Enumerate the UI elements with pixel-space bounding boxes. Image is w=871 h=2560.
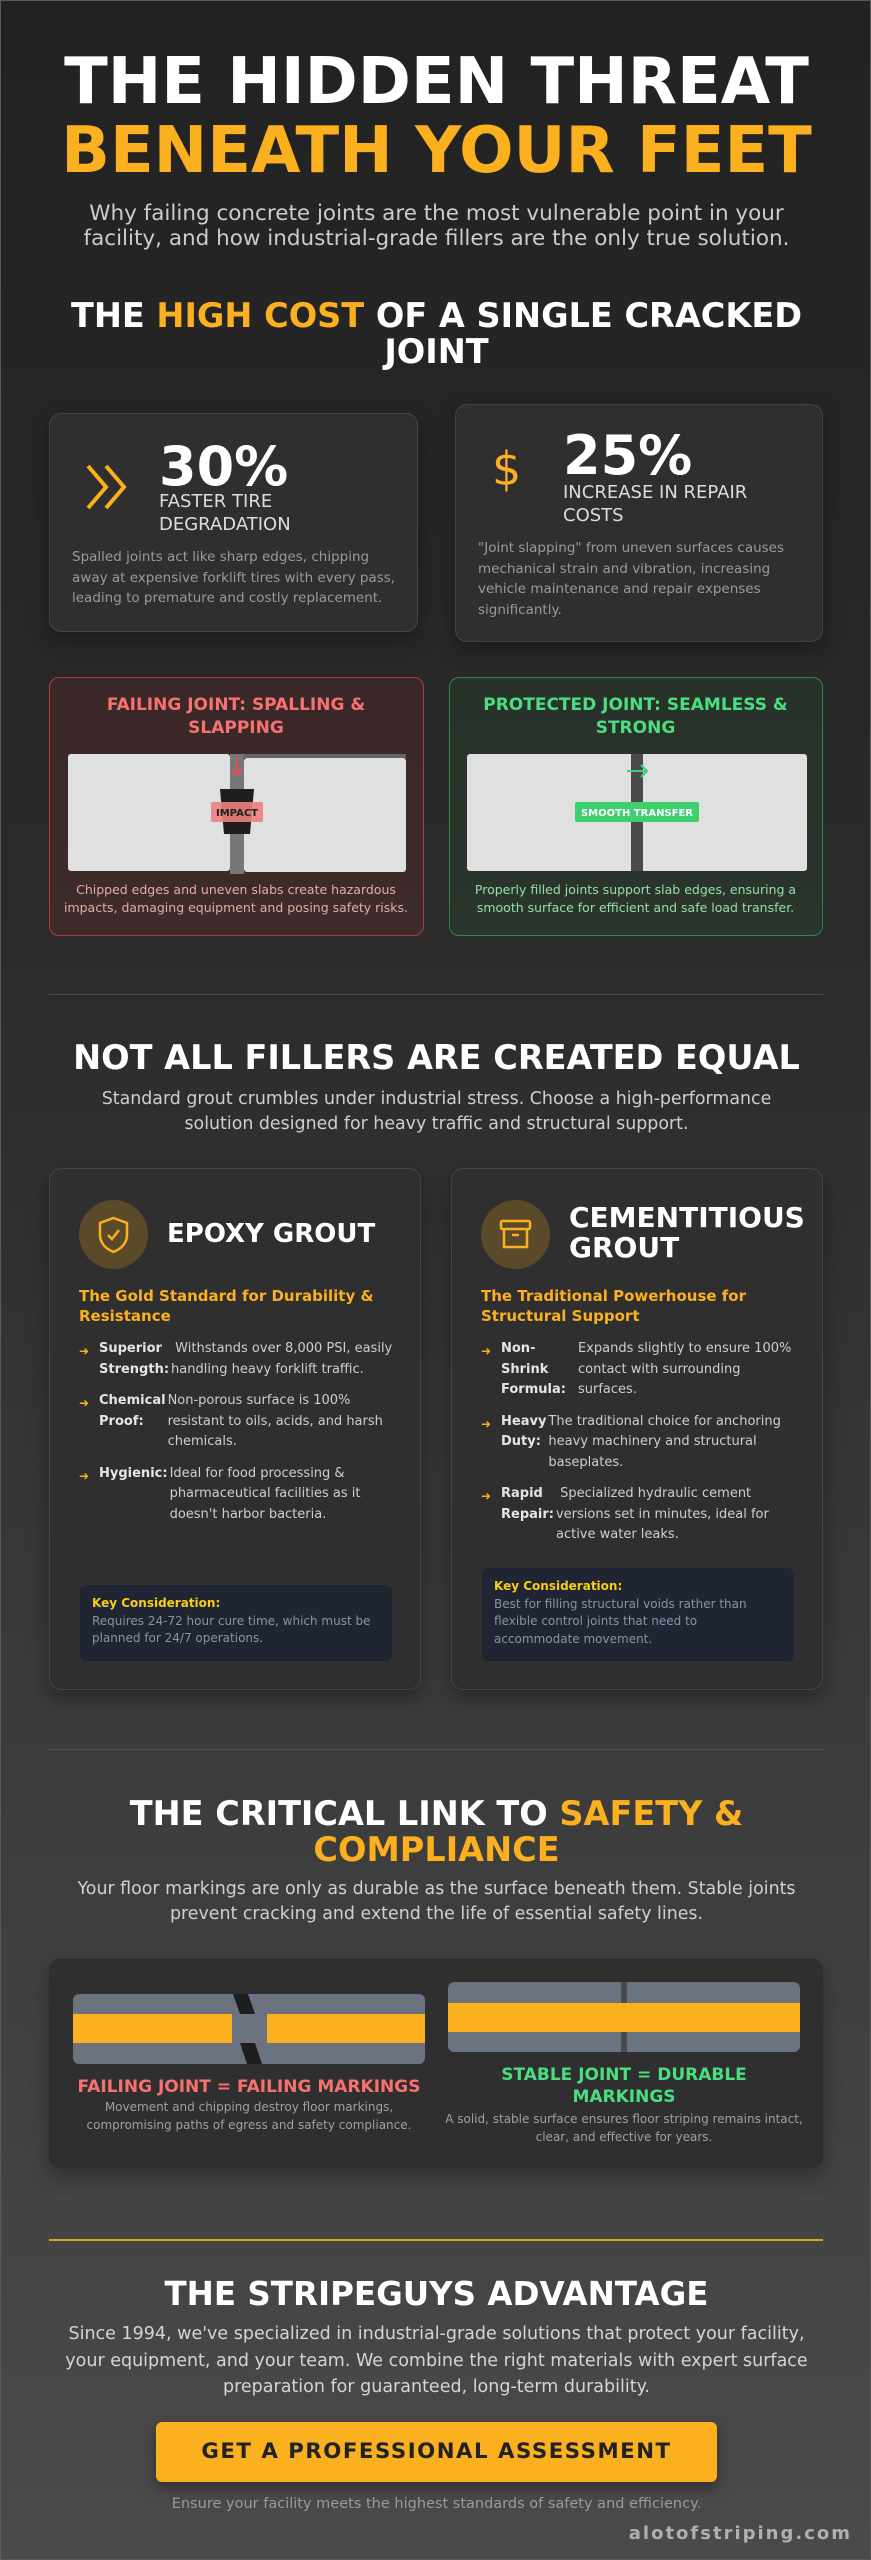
description: stable: clear, and effective for years. bbox=[536, 2130, 712, 2144]
illustration: stable markings bbox=[448, 1982, 800, 2052]
bullet list: Ideal for food processing & pharmaceutical facilities as it doesn't harbor bacteria. bbox=[170, 1466, 360, 1522]
label: stable bbox=[501, 2065, 747, 2107]
description: failing: Movement and chipping destroy floor markings, bbox=[105, 2100, 393, 2114]
heading bbox=[107, 695, 365, 738]
key consideration: Key Consideration: bbox=[494, 1579, 622, 1593]
icon: box bbox=[481, 1200, 550, 1269]
subtitle: critical link: prevent cracking and extend the life of essential safety lines. bbox=[170, 1904, 703, 1924]
bullet list: Strength: bbox=[99, 1362, 169, 1376]
bullet list: Proof: bbox=[99, 1414, 144, 1428]
description: failing: compromising paths of egress and safety compliance. bbox=[87, 2118, 411, 2132]
bullet list: ➜ bbox=[79, 1344, 89, 1358]
title: BENEATH YOUR FEET bbox=[61, 114, 812, 188]
heading: high cost: THE HIGH COST OF A SINGLE CRACKED bbox=[71, 296, 802, 335]
heading: PROTECTED JOINT: SEAMLESS & bbox=[483, 695, 788, 715]
bullet list: Chemical bbox=[99, 1393, 166, 1408]
heading: high cost bbox=[71, 296, 802, 371]
subtitle: fillers: solution designed for heavy traffic and structural support. bbox=[184, 1114, 688, 1134]
stat label bbox=[159, 491, 291, 535]
label: stable: MARKINGS bbox=[572, 2087, 676, 2107]
footer note: Ensure your facility meets the highest standards of safety and efficiency. bbox=[172, 2496, 701, 2512]
heading: SLAPPING bbox=[188, 718, 284, 738]
icon: shield bbox=[79, 1200, 148, 1269]
bullet list: Expands slightly to ensure 100% contact with surrounding surfaces. bbox=[578, 1341, 791, 1397]
heading: fillers: NOT ALL FILLERS ARE CREATED EQUAL bbox=[73, 1038, 800, 1077]
tagline: The Gold Standard for Durability & Resistance bbox=[79, 1287, 374, 1325]
bullet list bbox=[79, 1341, 392, 1522]
bullet list: ➜ bbox=[481, 1416, 491, 1430]
label: failing: FAILING JOINT = FAILING MARKINGS bbox=[78, 2077, 420, 2097]
description: Chipped edges and uneven slabs create hazardous bbox=[76, 882, 396, 897]
bullet list: ➜ bbox=[481, 1344, 491, 1358]
description: stable: A solid, stable surface ensures floor striping remains intact, bbox=[445, 2112, 803, 2126]
card title bbox=[569, 1201, 805, 1264]
stat label bbox=[563, 482, 747, 526]
key consideration bbox=[80, 1585, 392, 1661]
illustration: protected: SMOOTH TRANSFER bbox=[581, 808, 693, 819]
panel: failing joint bbox=[49, 677, 424, 936]
icon: dollar: $ bbox=[492, 442, 521, 496]
stat label: DEGRADATION bbox=[159, 514, 291, 535]
card title: EPOXY GROUT bbox=[167, 1219, 375, 1249]
illustration: failing: IMPACT bbox=[216, 808, 258, 819]
bullet list: Duty: bbox=[501, 1434, 541, 1449]
bullet list: Rapid bbox=[501, 1486, 543, 1501]
description: impacts, damaging equipment and posing safety risks. bbox=[64, 900, 408, 915]
illustration: failing markings bbox=[73, 1994, 425, 2064]
stat value: 30% bbox=[159, 435, 288, 498]
bullet list: ➜ bbox=[79, 1396, 89, 1410]
subtitle: fillers bbox=[102, 1089, 771, 1134]
description bbox=[475, 882, 796, 915]
illustration: protected bbox=[467, 754, 807, 871]
description: "Joint slapping" from uneven surfaces causes mechanical strain and vibration, increasing vehicle maintenance and repair expenses significantly. bbox=[478, 540, 784, 618]
subtitle: facility, and how industrial-grade fillers are the only true solution. bbox=[84, 226, 789, 251]
description: failing bbox=[87, 2100, 411, 2132]
bullet list: Specialized hydraulic cement versions set in minutes, ideal for active water leaks. bbox=[556, 1486, 769, 1542]
key consideration: Key Consideration: bbox=[92, 1596, 220, 1610]
bullet list: Shrink bbox=[501, 1362, 548, 1376]
bullet list: ➜ bbox=[79, 1468, 89, 1482]
body: advantage bbox=[65, 2324, 808, 2397]
card: epoxy grout bbox=[49, 1168, 421, 1690]
bullet list: Withstands over 8,000 PSI, easily handling heavy forklift traffic. bbox=[171, 1341, 392, 1376]
key consideration: Requires 24-72 hour cure time, which must be planned for 24/7 operations. bbox=[92, 1614, 370, 1645]
stat label: FASTER TIRE bbox=[159, 491, 272, 512]
card title: CEMENTITIOUS bbox=[569, 1201, 805, 1234]
heading: FAILING JOINT: SPALLING & bbox=[107, 695, 365, 715]
subtitle: Why failing concrete joints are the most vulnerable point in your bbox=[89, 201, 784, 226]
key consideration: Best for filling structural voids rather than flexible control joints that need to accommodate movement. bbox=[494, 1596, 747, 1646]
bullet list: Formula: bbox=[501, 1382, 566, 1397]
title: THE HIDDEN THREAT bbox=[64, 45, 809, 119]
bullet list: ➜ bbox=[481, 1489, 491, 1503]
description: Properly filled joints support slab edges, ensuring a bbox=[475, 882, 796, 897]
heading: critical link: COMPLIANCE bbox=[313, 1830, 560, 1869]
tagline: The Traditional Powerhouse for Structural Support bbox=[481, 1287, 746, 1325]
panel: markings comparison bbox=[49, 1959, 823, 2168]
watermark: alotofstriping.com bbox=[629, 2523, 852, 2544]
heading: high cost: JOINT bbox=[384, 332, 489, 371]
stat card: 30% bbox=[49, 413, 418, 632]
subtitle: critical link: Your floor markings are only as durable as the surface beneath them. Stable joints bbox=[78, 1879, 796, 1899]
bullet list: Non-porous surface is 100% resistant to oils, acids, and harsh chemicals. bbox=[168, 1393, 383, 1449]
bullet list: Repair: bbox=[501, 1506, 554, 1522]
stat label: INCREASE IN REPAIR bbox=[563, 482, 747, 503]
bullet list bbox=[481, 1341, 791, 1542]
subtitle bbox=[84, 201, 789, 251]
card title: GROUT bbox=[569, 1231, 679, 1264]
button: CTA bbox=[156, 2422, 717, 2482]
description bbox=[64, 882, 408, 915]
description: Spalled joints act like sharp edges, chipping away at expensive forklift tires with every pass, leading to premature and costly replacement. bbox=[72, 549, 395, 606]
stat label: COSTS bbox=[563, 505, 624, 526]
bullet list: Non- bbox=[501, 1341, 535, 1356]
bullet list: Hygienic: bbox=[99, 1466, 168, 1480]
title bbox=[61, 45, 812, 188]
description: smooth surface for efficient and safe load transfer. bbox=[477, 900, 794, 915]
bullet list: Superior bbox=[99, 1341, 162, 1356]
heading bbox=[483, 695, 788, 738]
button: CTA: GET A PROFESSIONAL ASSESSMENT bbox=[201, 2439, 672, 2464]
stat card: 25% bbox=[455, 404, 823, 642]
heading: critical link bbox=[130, 1794, 743, 1869]
bullet list: The traditional choice for anchoring heavy machinery and structural baseplates. bbox=[548, 1414, 781, 1470]
icon: chevrons bbox=[86, 464, 126, 510]
heading: STRONG bbox=[596, 718, 675, 738]
description: stable bbox=[445, 2112, 803, 2144]
stat value: 25% bbox=[563, 424, 692, 487]
heading: critical link: THE CRITICAL LINK TO SAFETY & bbox=[130, 1794, 743, 1833]
card: cementitious grout bbox=[451, 1168, 823, 1690]
label: stable: STABLE JOINT = DURABLE bbox=[501, 2065, 747, 2085]
heading: advantage: THE STRIPEGUYS ADVANTAGE bbox=[164, 2275, 709, 2313]
illustration: failing bbox=[68, 754, 406, 874]
key consideration bbox=[482, 1568, 794, 1661]
subtitle: critical link bbox=[78, 1879, 796, 1924]
body: advantage: your equipment, and your team. We combine the right materials with expert surface bbox=[65, 2350, 808, 2370]
body: advantage: Since 1994, we've specialized in industrial-grade solutions that protect your facility, bbox=[68, 2324, 805, 2344]
panel: protected joint bbox=[449, 677, 823, 936]
subtitle: fillers: Standard grout crumbles under industrial stress. Choose a high-performance bbox=[102, 1089, 771, 1109]
body: advantage: preparation for guaranteed, long-term durability. bbox=[223, 2377, 650, 2397]
bullet list: Heavy bbox=[501, 1414, 546, 1428]
